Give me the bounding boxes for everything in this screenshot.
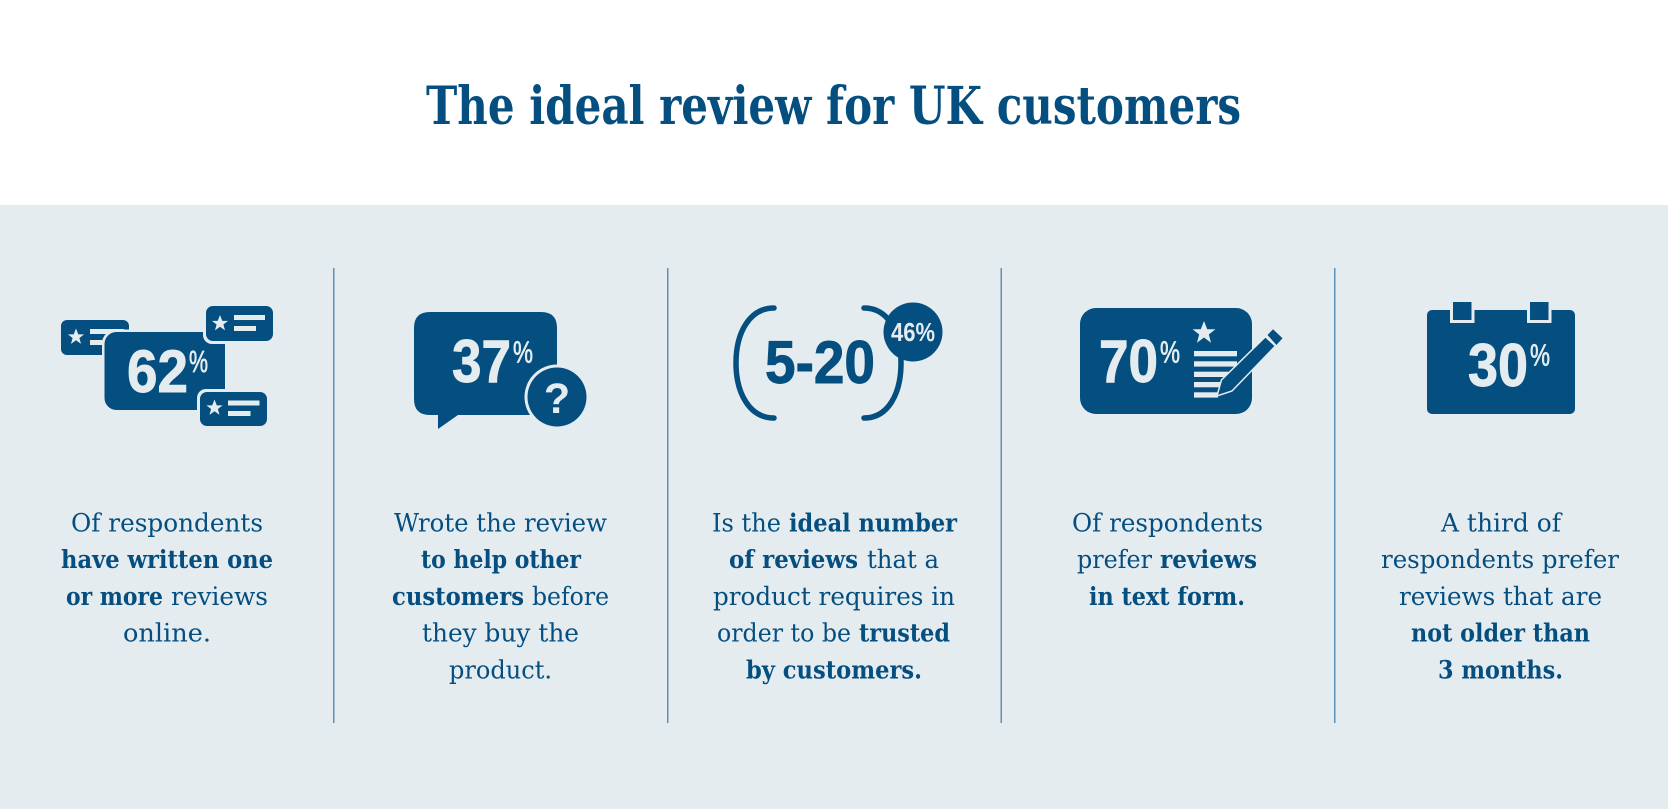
panel: recency: respondents prefer: [1381, 545, 1619, 574]
icon: calendar with 30%: [1427, 300, 1575, 414]
icon: review cards with 62%: 62: [127, 338, 188, 405]
panel: ideal number of reviews: that a: [867, 545, 939, 574]
panel: help other customers: customers: [392, 582, 524, 611]
icon: speech bubble with 37%: %: [513, 334, 533, 370]
panel: help other customers: [392, 312, 609, 684]
text: text form: Of respondents: [1072, 508, 1263, 538]
panel: ideal number of reviews: by customers.: [746, 656, 922, 684]
panel: text form: [1072, 308, 1282, 611]
icon: card with pencil and 70%: 70: [1099, 328, 1158, 395]
panel: recency: 3 months.: [1438, 656, 1563, 684]
icon: speech bubble with 37%: [414, 312, 590, 430]
icon: card with pencil and 70%: [1080, 308, 1282, 414]
panel: help other customers: before: [532, 582, 609, 611]
panel: text form: in text form.: [1089, 582, 1245, 611]
icon: calendar with 30%: %: [1530, 338, 1550, 372]
panel: recency: not older than: [1411, 618, 1590, 648]
panel: text form: prefer: [1077, 545, 1152, 574]
panel: written reviews: reviews: [171, 582, 268, 611]
text: ideal number of reviews: ideal number: [789, 508, 958, 538]
panel: written reviews: [61, 303, 276, 648]
icon: review cards with 62%: [61, 303, 276, 429]
text: help other customers: Wrote the review: [394, 508, 608, 538]
panel: help other customers: product.: [449, 656, 552, 684]
panel: ideal number of reviews: order to be: [717, 618, 851, 648]
panel: written reviews: have written one: [61, 545, 273, 574]
panel: ideal number of reviews: trusted: [859, 618, 950, 648]
icon: brackets with 5-20 and 46%: 46%: [891, 317, 935, 347]
text: recency: A third of: [1440, 508, 1563, 538]
panel: ideal number of reviews: product requires in: [713, 582, 955, 611]
panel: help other customers: to help other: [421, 545, 582, 574]
title: The ideal review for UK customers: [426, 76, 1241, 137]
icon: calendar with 30%: 30: [1468, 332, 1528, 399]
icon: speech bubble with 37%: ?: [544, 375, 570, 423]
panel: recency: [1381, 300, 1619, 684]
panel: help other customers: they buy the: [422, 618, 579, 648]
panel: ideal number of reviews: [712, 302, 958, 684]
panel: written reviews: or more: [66, 582, 163, 611]
icon: card with pencil and 70%: %: [1160, 334, 1180, 370]
panel: recency: reviews that are: [1399, 582, 1602, 611]
icon: brackets with 5-20 and 46%: [736, 302, 942, 418]
panel: written reviews: online.: [123, 618, 211, 648]
panel: text form: reviews: [1160, 545, 1257, 574]
text: written reviews: Of respondents: [71, 508, 263, 538]
panel: ideal number of reviews: of reviews: [729, 545, 858, 574]
icon: brackets with 5-20 and 46%: 5-20: [765, 329, 875, 396]
text: ideal number of reviews: Is the: [712, 508, 781, 538]
icon: speech bubble with 37%: 37: [452, 328, 511, 395]
icon: review cards with 62%: %: [189, 344, 208, 379]
